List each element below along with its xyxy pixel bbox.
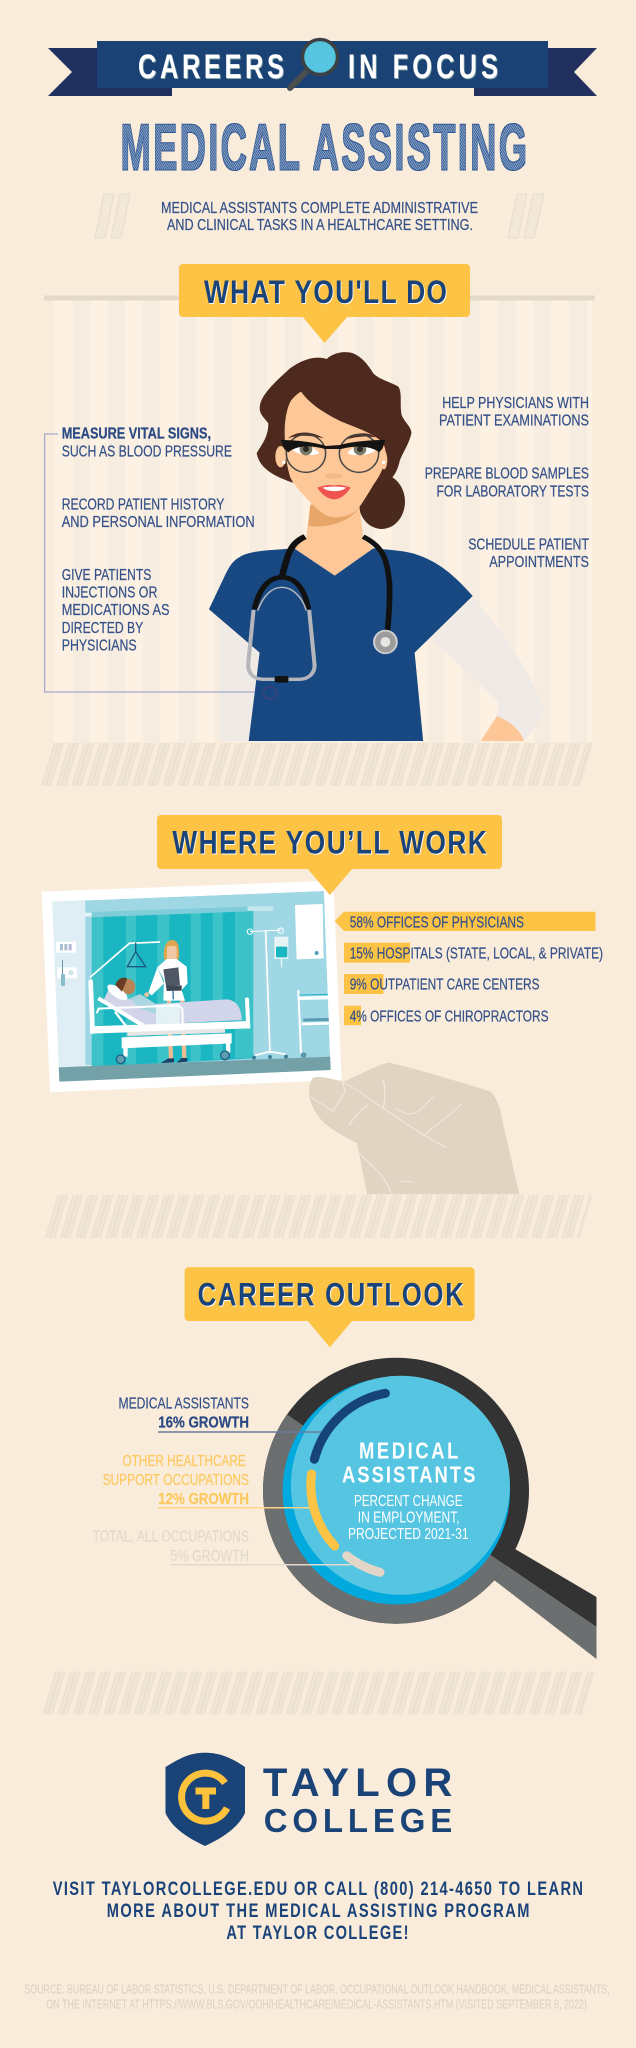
panel: striped backdrop — [44, 296, 595, 742]
bar: 4% offices of chiropractors — [344, 1006, 548, 1026]
eyes — [292, 443, 376, 455]
logo monogram — [182, 1773, 227, 1821]
ribbon right tail — [474, 48, 597, 96]
face — [275, 392, 387, 517]
heading: where you'll work — [157, 815, 502, 895]
call to action — [53, 1877, 583, 1944]
task: help physicians: PATIENT EXAMINATIONS — [439, 413, 589, 430]
task list left — [62, 426, 255, 655]
lens text: ASSISTANTS — [342, 1462, 475, 1488]
left sleeve — [219, 620, 260, 741]
call to action: VISIT TAYLORCOLLEGE.EDU OR CALL (800) 214-4650 TO LEARN — [53, 1877, 583, 1900]
task: give patients injections: INJECTIONS OR — [62, 584, 157, 601]
label: other healthcare growth: 12% GROWTH — [158, 1491, 249, 1508]
bar: 9% outpatient care centers: 9% OUTPATIENT CARE CENTERS — [350, 977, 540, 994]
hand holding photo — [309, 1063, 519, 1194]
eyebrows — [288, 432, 376, 440]
ribbon left tail — [48, 48, 172, 96]
label: medical assistants growth — [118, 1396, 249, 1432]
label: all occupations growth: 5% GROWTH — [170, 1548, 249, 1565]
in focus label: IN FOCUS — [348, 49, 498, 86]
task: prepare blood samples: FOR LABORATORY TESTS — [436, 484, 589, 501]
logo wordmark — [263, 1761, 452, 1839]
task: give patients injections: MEDICATIONS AS — [62, 602, 170, 619]
magnifying glass chart — [92, 1358, 596, 1659]
glasses — [281, 434, 385, 472]
task: help physicians: HELP PHYSICIANS WITH — [442, 395, 589, 412]
curtain — [85, 906, 273, 1067]
task: measure vital signs — [62, 426, 232, 460]
hand — [481, 716, 524, 741]
source note — [24, 1982, 610, 2011]
lens — [283, 1376, 510, 1604]
task: schedule appointments: SCHEDULE PATIENT — [468, 536, 589, 553]
leader lines — [158, 1432, 351, 1565]
magnifier handle — [492, 1549, 596, 1659]
leader line for left task list — [45, 434, 276, 699]
lens text: IN EMPLOYMENT, — [358, 1510, 460, 1527]
label: all occupations growth — [92, 1529, 249, 1565]
heading: what you'll do: WHAT YOU'LL DO — [204, 276, 447, 311]
divider band 2 — [45, 1195, 593, 1238]
logo shield — [166, 1753, 245, 1846]
heading: career outlook: CAREER OUTLOOK — [198, 1278, 464, 1313]
ears — [275, 446, 387, 469]
heading: career outlook — [185, 1267, 475, 1347]
task: measure vital signs: SUCH AS BLOOD PRESSURE — [62, 443, 232, 460]
bar: 58% offices of physicians: 58% OFFICES OF PHYSICIANS — [350, 915, 524, 932]
label: all occupations growth: TOTAL, ALL OCCUPATIONS — [92, 1529, 249, 1546]
header ribbon — [48, 40, 597, 96]
scrubs top — [209, 548, 473, 741]
task: record patient history: AND PERSONAL INFORMATION — [62, 514, 255, 531]
neck — [294, 503, 373, 576]
left wall panel — [52, 901, 92, 1068]
heading: where you'll work: WHERE YOU’LL WORK — [172, 826, 487, 861]
intro text: AND CLINICAL TASKS IN A HEALTHCARE SETTING. — [167, 217, 473, 234]
right arm — [432, 597, 544, 741]
cabinet — [295, 904, 324, 959]
call to action: MORE ABOUT THE MEDICAL ASSISTING PROGRAM — [107, 1899, 529, 1922]
lens text — [342, 1438, 475, 1543]
photo of hospital room — [42, 881, 342, 1092]
bed — [90, 942, 250, 1064]
lens text: PERCENT CHANGE — [354, 1493, 462, 1510]
logo wordmark: COLLEGE — [264, 1802, 452, 1839]
intro text: MEDICAL ASSISTANTS COMPLETE ADMINISTRATIVE — [161, 200, 478, 217]
title: MEDICAL ASSISTING — [120, 112, 527, 184]
bar: 4% offices of chiropractors: 4% OFFICES OF CHIROPRACTORS — [350, 1009, 548, 1026]
divider band 3 — [43, 1672, 595, 1714]
bar chart: employers — [335, 912, 603, 1026]
nose — [325, 473, 343, 479]
call to action: AT TAYLOR COLLEGE! — [226, 1921, 409, 1944]
logo — [166, 1753, 452, 1846]
task: prepare blood samples: PREPARE BLOOD SAMPLES — [425, 466, 589, 483]
task: give patients injections: PHYSICIANS — [62, 638, 137, 655]
icon: small magnifying glass — [290, 40, 338, 88]
label: other healthcare growth — [103, 1453, 249, 1508]
task: schedule appointments: APPOINTMENTS — [489, 554, 589, 571]
label: other healthcare growth: OTHER HEALTHCARE — [122, 1453, 246, 1470]
task: give patients injections: GIVE PATIENTS — [62, 567, 151, 584]
task: record patient history — [62, 496, 255, 531]
ribbon main band — [97, 41, 548, 88]
doctor — [144, 940, 188, 1063]
logo wordmark: TAYLOR — [263, 1761, 452, 1805]
task: prepare blood samples — [425, 466, 589, 501]
nurse illustration — [209, 352, 544, 741]
magnifier rim — [263, 1358, 529, 1624]
bar: 9% outpatient care centers — [344, 974, 540, 994]
photo frame — [42, 881, 342, 1092]
label: medical assistants growth: MEDICAL ASSISTANTS — [118, 1396, 249, 1413]
floor — [58, 1057, 332, 1083]
heading: what you'll do — [179, 264, 470, 343]
task list right — [425, 395, 589, 571]
task: measure vital signs: MEASURE VITAL SIGNS, — [62, 426, 211, 443]
wall sockets — [56, 942, 77, 986]
task: record patient history: RECORD PATIENT HISTORY — [62, 496, 224, 513]
label: other healthcare growth: SUPPORT OCCUPATIONS — [103, 1472, 249, 1489]
earrings — [282, 461, 385, 464]
side cart — [298, 990, 330, 1057]
decorative slashes left — [95, 194, 130, 238]
decorative slashes right — [508, 194, 544, 238]
lens text: MEDICAL — [359, 1438, 459, 1464]
room wall — [52, 891, 331, 1082]
careers label: CAREERS — [138, 49, 284, 86]
mouth — [317, 485, 351, 499]
task: give patients injections: DIRECTED BY — [62, 620, 143, 637]
label: medical assistants growth: 16% GROWTH — [158, 1415, 249, 1432]
task: schedule appointments — [468, 536, 589, 571]
face shape — [285, 392, 386, 517]
divider band 1 — [41, 743, 593, 786]
task: give patients injections — [62, 567, 170, 655]
growth arcs — [311, 1393, 385, 1572]
task: help physicians — [439, 395, 589, 430]
iv stand — [247, 928, 288, 1060]
body — [209, 503, 544, 741]
stethoscope — [248, 537, 397, 683]
lens text: PROJECTED 2021-31 — [348, 1526, 469, 1543]
neck shadow — [308, 505, 359, 526]
intro text — [161, 200, 478, 234]
hair back and bun — [257, 352, 411, 529]
